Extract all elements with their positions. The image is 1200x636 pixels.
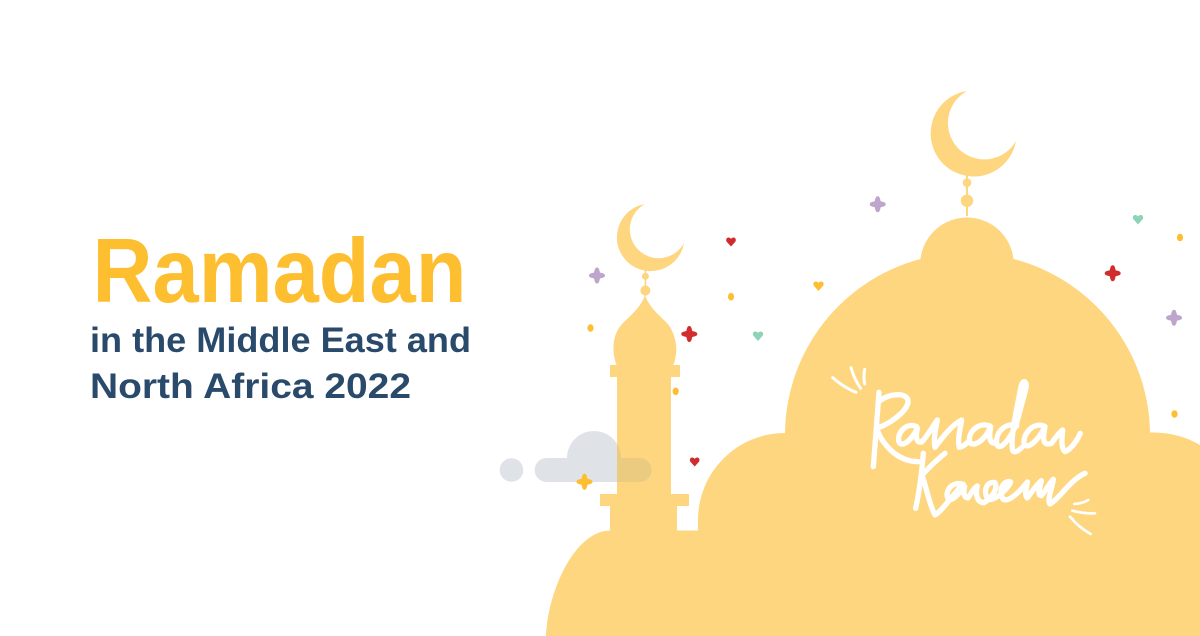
cloud puff xyxy=(500,458,523,482)
third letter a and n xyxy=(1024,425,1080,452)
cloud xyxy=(500,431,652,482)
dot xyxy=(728,293,734,301)
second letter a xyxy=(969,425,997,444)
sparkle: purple xyxy=(589,268,605,284)
cloud body xyxy=(535,431,652,482)
heart: mint xyxy=(753,332,763,341)
large mosque dome and lobes xyxy=(546,217,1200,636)
main dome finial xyxy=(961,174,973,216)
sparkle: red xyxy=(681,326,697,342)
word Kareem xyxy=(922,453,1085,515)
title: Ramadan: Ramadan xyxy=(92,221,466,322)
dot xyxy=(1171,410,1178,418)
minaret finial xyxy=(640,268,650,296)
sparkle: purple xyxy=(870,196,886,212)
heart: mint xyxy=(1133,215,1143,224)
letter stem K xyxy=(916,453,923,508)
sparkle: purple xyxy=(1166,310,1182,326)
letter R bowl and leg xyxy=(877,395,918,462)
flourish top left xyxy=(833,368,865,392)
main dome crescent xyxy=(931,91,1016,176)
cloud overlap on minaret xyxy=(617,444,652,482)
heart: gold xyxy=(813,282,824,291)
flourish bottom right xyxy=(1070,500,1095,534)
dot xyxy=(1177,234,1183,241)
dots xyxy=(587,234,1183,418)
sparkle: gold xyxy=(576,474,592,490)
subtitle line two: North Africa 2022 xyxy=(90,366,411,406)
hand lettering: Ramadan Kareem xyxy=(833,368,1095,534)
heart: red xyxy=(690,458,700,466)
illustration: mosque silhouette xyxy=(546,91,1200,636)
letter stem R xyxy=(873,392,879,467)
minaret crescent xyxy=(617,204,684,271)
dot xyxy=(673,388,679,395)
hearts xyxy=(690,215,1143,466)
letters a and m xyxy=(899,420,968,447)
subtitle line one: in the Middle East and xyxy=(90,320,471,360)
dot xyxy=(587,324,594,332)
letter d xyxy=(997,382,1026,452)
sparkle: red xyxy=(1105,265,1121,281)
heart: red xyxy=(726,238,736,246)
minaret dome xyxy=(613,295,676,366)
title block xyxy=(90,221,471,406)
sparkles xyxy=(576,196,1182,490)
